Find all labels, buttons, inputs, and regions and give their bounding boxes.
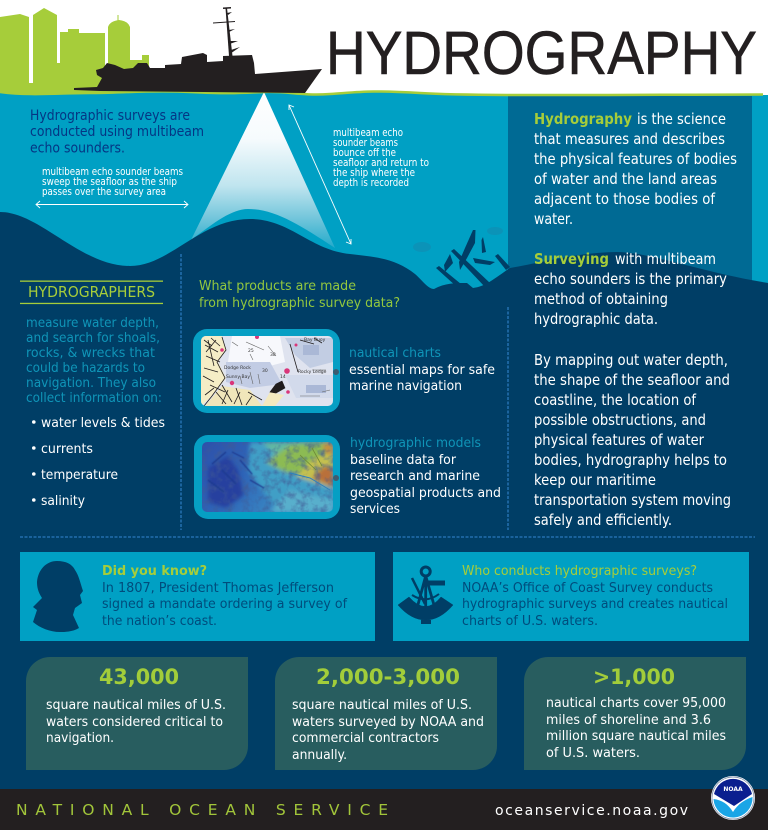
mapping benefits text: possible obstructions, and bbox=[534, 411, 706, 429]
stat card: 43,000: navigation. bbox=[46, 730, 114, 746]
who conducts text: NOAA’s Office of Coast Survey conducts bbox=[462, 580, 713, 596]
nautical chart image: 30 bbox=[262, 368, 268, 374]
footer bar bbox=[0, 789, 768, 830]
hydrography definition text: of water and the land areas bbox=[534, 170, 717, 188]
stat card: >1,000: million square nautical miles bbox=[546, 728, 726, 744]
survey intro text: echo sounders. bbox=[30, 140, 125, 156]
stat card: 2,000-3,000: commercial contractors bbox=[292, 730, 439, 746]
icon: NOAA logo bbox=[711, 776, 755, 820]
nautical chart image: Rocky Ledge bbox=[298, 369, 327, 375]
bounce caption: the ship where the bbox=[333, 167, 415, 179]
hydrography definition text: the physical features of bodies bbox=[534, 150, 737, 168]
shipwreck bbox=[413, 227, 510, 287]
did you know text: signed a mandate ordering a survey of bbox=[102, 596, 348, 612]
stat card: >1,000: of U.S. waters. bbox=[546, 745, 640, 761]
who conducts text: hydrographic surveys and creates nautical bbox=[462, 596, 728, 612]
hydrography definition text: water. bbox=[534, 210, 573, 228]
icon: NOAA logo: NOAA bbox=[723, 786, 743, 793]
hydrographers description: and search for shoals, bbox=[26, 330, 160, 346]
mapping benefits text: physical features of water bbox=[534, 431, 705, 449]
hydrographers description: could be hazards to bbox=[26, 360, 145, 376]
mapping benefits text: bodies, hydrography helps to bbox=[534, 451, 727, 469]
nautical chart image: 14 bbox=[280, 374, 286, 380]
nautical chart image: 25 bbox=[248, 348, 254, 354]
stat card: >1,000: >1,000 bbox=[593, 665, 675, 689]
bounce caption: bounce off the bbox=[333, 147, 396, 159]
measurements list: salinity bbox=[41, 493, 85, 509]
stat card: >1,000 bbox=[524, 657, 746, 770]
nautical chart image: 38 bbox=[270, 352, 276, 358]
mapping benefits text: coastline, the location of bbox=[534, 391, 697, 409]
mapping benefits text: safely and efficiently. bbox=[534, 511, 672, 529]
stat card: 2,000-3,000 bbox=[275, 657, 497, 770]
hydrographic models caption: baseline data for bbox=[350, 452, 456, 468]
stat card: 2,000-3,000: 2,000-3,000 bbox=[316, 665, 460, 689]
ship silhouette bbox=[74, 7, 322, 93]
panel: did you know bbox=[20, 552, 375, 641]
nautical charts caption bbox=[349, 345, 495, 394]
skyline bbox=[0, 8, 149, 94]
stat card: 43,000: waters considered critical to bbox=[46, 714, 223, 730]
stat card: 43,000: square nautical miles of U.S. bbox=[46, 697, 226, 713]
survey intro text: Hydrographic surveys are bbox=[30, 108, 190, 124]
sweep caption bbox=[42, 166, 183, 198]
did you know text: Did you know? bbox=[102, 563, 207, 579]
hydrographers description: measure water depth, bbox=[26, 315, 159, 331]
products heading: What products are made bbox=[199, 278, 356, 294]
survey intro text: conducted using multibeam bbox=[30, 124, 204, 140]
mapping benefits text bbox=[534, 351, 731, 529]
bounce caption: seafloor and return to bbox=[333, 157, 429, 169]
footer bar: oceanservice.noaa.gov bbox=[495, 803, 688, 819]
water surface bbox=[0, 91, 768, 300]
hydrographic models caption: geospatial products and bbox=[350, 485, 501, 501]
stat card: 2,000-3,000: waters surveyed by NOAA and bbox=[292, 714, 484, 730]
hydrographic model image bbox=[194, 435, 340, 519]
nautical chart image: Sunny Bay bbox=[226, 374, 250, 380]
hydrographic models caption bbox=[350, 435, 501, 517]
hydrography definition text: that measures and describes bbox=[534, 130, 725, 148]
hydrographers description: rocks, & wrecks that bbox=[26, 345, 155, 361]
measurements list: currents bbox=[41, 441, 93, 457]
sweep caption: multibeam echo sounder beams bbox=[42, 166, 183, 178]
who conducts text bbox=[462, 563, 728, 629]
bounce caption bbox=[333, 127, 429, 189]
hydrography definition text bbox=[534, 110, 737, 228]
arrow: beam depth bbox=[289, 105, 351, 244]
did you know text bbox=[102, 563, 348, 629]
stat card: 43,000: 43,000 bbox=[99, 665, 179, 689]
mapping benefits text: the shape of the seafloor and bbox=[534, 371, 730, 389]
hydrographers description: collect information on: bbox=[26, 390, 162, 406]
who conducts text: charts of U.S. waters. bbox=[462, 613, 598, 629]
surveying definition text: echo sounders is the primary bbox=[534, 270, 727, 288]
surveying definition text: method of obtaining bbox=[534, 290, 668, 308]
nautical chart image: Dodge Rock bbox=[224, 365, 251, 371]
icon: Jefferson silhouette bbox=[33, 561, 83, 632]
hydrography definition text: is the science bbox=[637, 110, 726, 128]
who conducts text: Who conducts hydrographic surveys? bbox=[462, 563, 697, 579]
products heading bbox=[199, 278, 400, 311]
panel: who conducts bbox=[393, 552, 749, 641]
bounce caption: depth is recorded bbox=[333, 177, 409, 189]
stat card: >1,000: nautical charts cover 95,000 bbox=[546, 695, 726, 711]
sonar beam bbox=[191, 92, 335, 248]
arrow: sweep width bbox=[36, 201, 188, 208]
right explanation panel background bbox=[508, 96, 752, 286]
seafloor bbox=[0, 212, 768, 830]
nautical charts caption: essential maps for safe bbox=[349, 362, 495, 378]
surveying definition text: with multibeam bbox=[615, 250, 716, 268]
surveying definition text: hydrographic data. bbox=[534, 310, 658, 328]
dotted dividers bbox=[20, 254, 755, 537]
surveying definition text bbox=[534, 250, 727, 328]
stat card: 43,000 bbox=[26, 657, 248, 770]
bounce caption: sounder beams bbox=[333, 137, 398, 149]
surveying definition text: Surveying bbox=[534, 250, 609, 268]
mapping benefits text: By mapping out water depth, bbox=[534, 351, 728, 369]
nautical charts caption: nautical charts bbox=[349, 345, 441, 361]
hydrography definition text: adjacent to those bodies of bbox=[534, 190, 716, 208]
hydrographic models caption: research and marine bbox=[350, 468, 480, 484]
sweep caption: passes over the survey area bbox=[42, 186, 166, 198]
footer bar: NATIONAL OCEAN SERVICE bbox=[16, 801, 388, 819]
survey intro text bbox=[30, 108, 204, 156]
did you know text: the nation’s coast. bbox=[102, 613, 217, 629]
hydrographic models caption: hydrographic models bbox=[350, 435, 481, 451]
icon: sextant bbox=[398, 567, 453, 622]
measurements list bbox=[32, 415, 165, 509]
hydrographic models caption: services bbox=[350, 501, 400, 517]
nautical charts caption: marine navigation bbox=[349, 378, 462, 394]
green shoreline line bbox=[0, 91, 763, 95]
nautical chart image bbox=[193, 329, 340, 413]
products heading: from hydrographic survey data? bbox=[199, 295, 400, 311]
hydrographers description bbox=[26, 315, 162, 406]
stat card: >1,000: miles of shoreline and 3.6 bbox=[546, 712, 711, 728]
sweep caption: sweep the seafloor as the ship bbox=[42, 176, 177, 188]
hydrography definition text: Hydrography bbox=[534, 110, 632, 128]
hydrographers description: navigation. They also bbox=[26, 375, 156, 391]
measurements list: water levels & tides bbox=[41, 415, 165, 431]
did you know text: In 1807, President Thomas Jefferson bbox=[102, 580, 334, 596]
bounce caption: multibeam echo bbox=[333, 127, 403, 139]
mapping benefits text: transportation system moving bbox=[534, 491, 731, 509]
stat card: 2,000-3,000: square nautical miles of U.S. bbox=[292, 697, 472, 713]
nautical chart image: Bay Buoy bbox=[304, 337, 326, 343]
mapping benefits text: keep our maritime bbox=[534, 471, 656, 489]
hydrographers heading: HYDROGRAPHERS bbox=[28, 283, 155, 301]
stat card: 2,000-3,000: annually. bbox=[292, 747, 347, 763]
measurements list: temperature bbox=[41, 467, 118, 483]
